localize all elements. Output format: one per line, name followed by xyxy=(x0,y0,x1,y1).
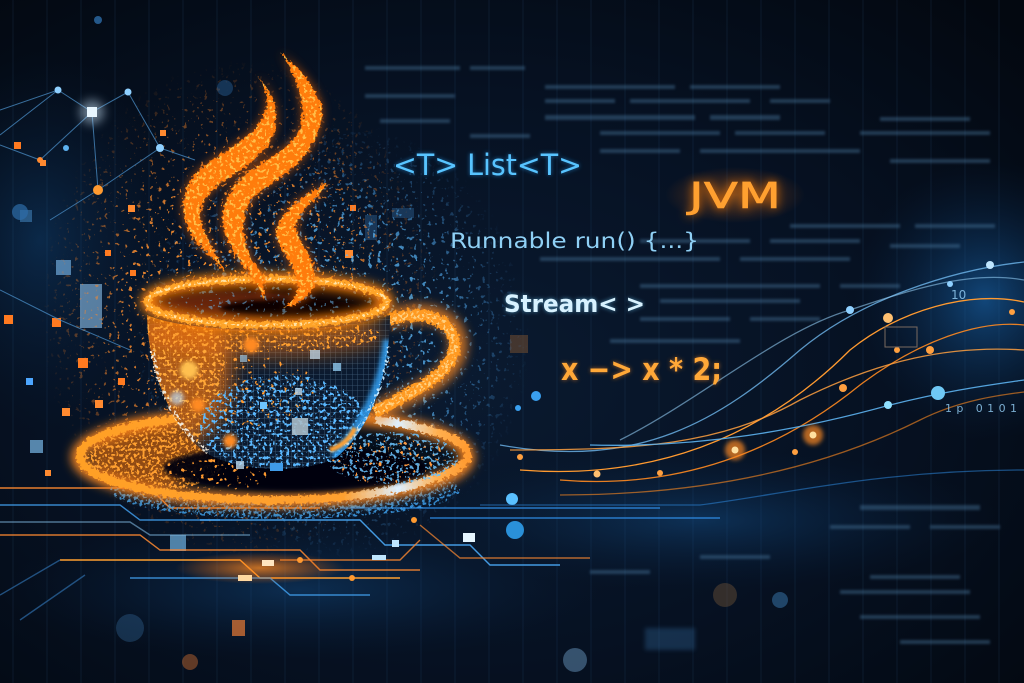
code: runnable: Runnable run() {...} xyxy=(450,229,699,253)
cup body xyxy=(147,315,391,471)
saucer xyxy=(78,413,468,519)
code: generic list: <T> List<T> xyxy=(393,148,582,182)
network lines top-left xyxy=(0,90,195,350)
code: JVM: JVM xyxy=(686,176,781,217)
binary labels xyxy=(945,288,1017,415)
code: lambda: x −> x * 2; xyxy=(561,352,722,388)
circuit traces bottom-left xyxy=(0,488,720,620)
code: lambda: x −> x * 2; xyxy=(561,352,722,388)
blurred code lines background xyxy=(365,66,1000,644)
code: stream: Stream< > xyxy=(504,290,645,318)
scattered pixels, left xyxy=(4,130,528,636)
cup rim xyxy=(147,279,387,325)
data waves right xyxy=(480,262,1024,505)
steam xyxy=(183,52,327,308)
particle field around cup xyxy=(40,60,530,560)
code: generic list: <T> List<T> xyxy=(393,148,582,182)
circuit nodes and bokeh xyxy=(116,391,788,672)
binary labels: 10 xyxy=(951,288,966,302)
network nodes xyxy=(12,16,233,220)
wave nodes xyxy=(517,261,1015,478)
code: JVM xyxy=(600,167,1024,223)
binary labels: 1p 0101 xyxy=(945,402,1017,415)
handle xyxy=(375,313,458,412)
illustration: coffee cup xyxy=(78,52,468,519)
code: stream: Stream< > xyxy=(504,290,645,318)
code: JVM: JVM xyxy=(686,176,781,217)
